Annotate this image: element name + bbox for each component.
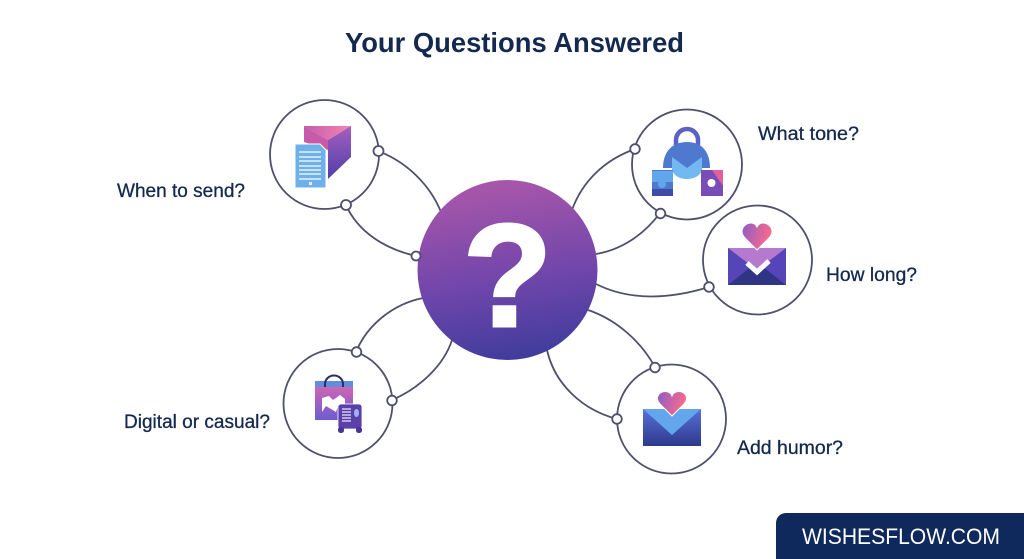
footer badge: WISHESFLOW.COM [802,524,1000,549]
panel: digital or casual [284,349,392,458]
label: how long: How long? [826,265,917,286]
connector lines [346,149,709,419]
label: digital or casual: Digital or casual? [124,412,270,433]
label: what tone: What tone? [758,124,859,145]
connector nodes [341,144,714,424]
central question circle: ? [463,194,552,357]
label: add humor: Add humor? [737,438,843,459]
panel: how long [703,206,812,314]
icon: heart over envelope [728,223,786,285]
footer badge [776,513,1024,559]
icon: bag with card [315,376,362,433]
panel: when to send [270,100,379,209]
icon: lock with two cards [652,129,723,196]
title: Your Questions Answered [345,27,684,58]
label: when to send: When to send? [117,181,245,202]
panel: what tone [632,110,742,220]
central question circle [418,180,598,360]
icon: folded envelope with document [295,126,351,188]
icon: heart envelope [643,392,701,446]
panel: add humor [617,364,726,474]
